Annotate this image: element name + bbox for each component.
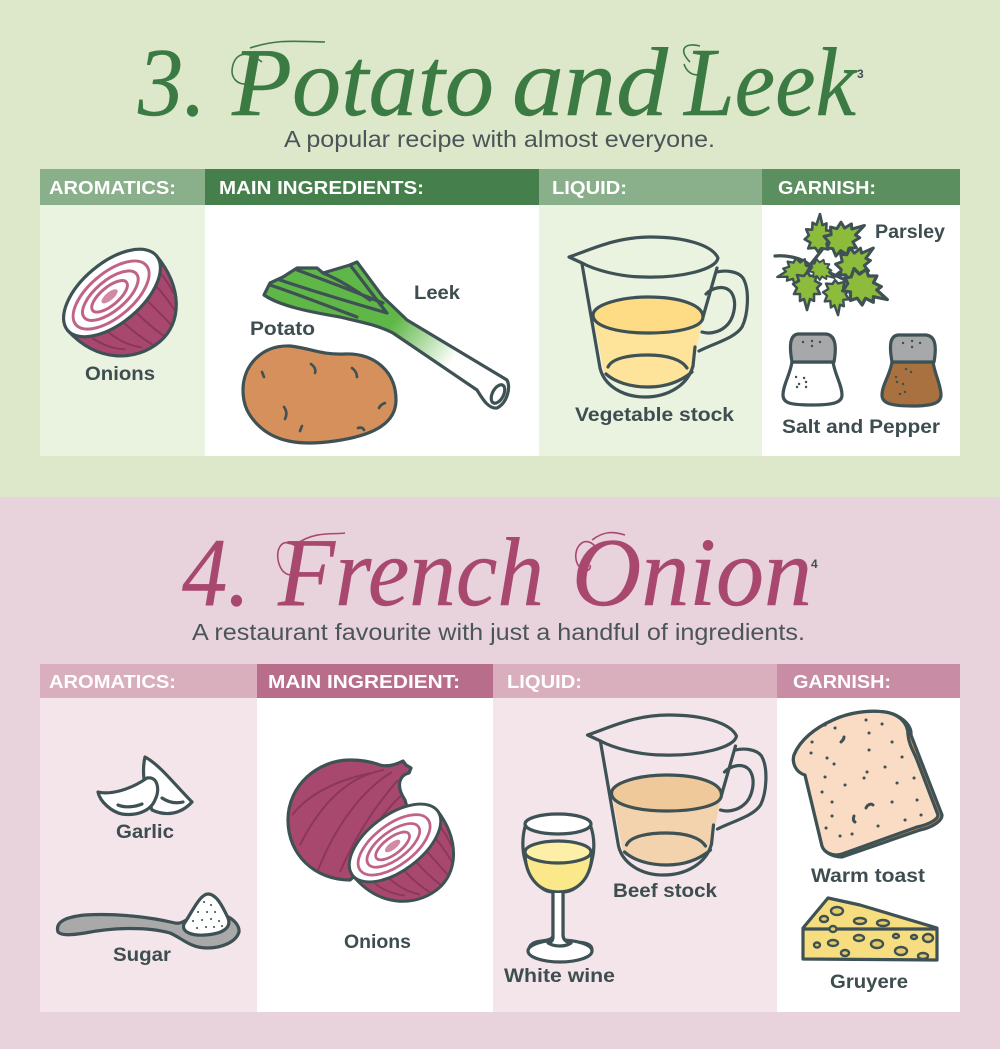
label: onions: Onions [344, 932, 411, 953]
panel body [40, 698, 257, 1012]
header: garnish [777, 664, 960, 698]
icon: gruyere cheese [803, 898, 937, 960]
title: 3. Potato and Leek: Potato [231, 29, 494, 137]
icon: warm toast [793, 711, 942, 857]
icon: salt shaker [783, 334, 842, 405]
icon: spoon of sugar [57, 894, 239, 948]
icon: measuring jug of vegetable stock [569, 237, 747, 397]
background: pink band [0, 497, 1000, 1049]
label: potato: Potato [250, 319, 315, 340]
subtitle: A restaurant favourite with just a handful of ingredients. [192, 619, 805, 645]
panel body [777, 698, 960, 1012]
panel: aromatics [40, 169, 205, 456]
panel: main ingredients [205, 169, 539, 456]
panel body [539, 205, 762, 456]
label: salt and pepper: Salt and Pepper [782, 417, 941, 438]
panel body [493, 698, 777, 1012]
icon: glass of white wine [523, 814, 594, 962]
header: aromatics [40, 664, 257, 698]
header: liquid [539, 169, 762, 205]
header: main ingredients: MAIN INGREDIENTS: [219, 178, 424, 198]
title: 3. Potato and Leek: and [512, 29, 669, 137]
label: gruyere: Gruyere [830, 972, 908, 993]
header: garnish: GARNISH: [778, 178, 876, 198]
header: liquid: LIQUID: [552, 178, 627, 198]
section: potato and leek [40, 29, 960, 456]
icon: halved red onion [48, 233, 200, 382]
title: 4. French Onion: 4 [811, 557, 818, 571]
background: green band [0, 0, 1000, 497]
title: 4. French Onion: Onion [572, 519, 812, 627]
section: french onion [40, 519, 960, 1012]
title: 3. Potato and Leek: Leek [682, 29, 857, 137]
icon: garlic [98, 757, 192, 814]
header: liquid [493, 664, 777, 698]
icon: parsley [774, 212, 895, 316]
label: leek: Leek [414, 283, 460, 304]
panel: liquid [493, 664, 777, 1012]
icon: measuring jug of beef stock [588, 715, 766, 875]
title: 4. French Onion: French [277, 519, 544, 627]
label: parsley: Parsley [875, 222, 945, 243]
label: onions: Onions [85, 364, 155, 385]
label: white wine: White wine [504, 966, 615, 987]
title: 3. Potato and Leek [137, 29, 864, 137]
title: 4. French Onion [182, 519, 818, 627]
header: aromatics: AROMATICS: [49, 178, 176, 198]
subtitle: A popular recipe with almost everyone. [284, 126, 715, 152]
label: warm toast: Warm toast [811, 866, 926, 887]
title: 4. French Onion: 4. [182, 519, 250, 627]
icon: potato [243, 346, 396, 443]
panel: liquid [539, 169, 762, 456]
header: garnish: GARNISH: [793, 672, 891, 692]
panel: aromatics [40, 664, 257, 1012]
header: liquid: LIQUID: [507, 672, 582, 692]
panel: garnish [762, 169, 960, 456]
panel: main ingredient [257, 664, 493, 1012]
icon: leek [264, 262, 509, 408]
icon: red onions [288, 760, 475, 925]
panel body [257, 698, 493, 1012]
header: main ingredient: MAIN INGREDIENT: [268, 672, 460, 692]
header: aromatics: AROMATICS: [49, 672, 176, 692]
icon: pepper shaker [882, 335, 941, 406]
panel body [205, 205, 539, 456]
title: 3. Potato and Leek: 3. [137, 29, 206, 137]
header: main ingredient [257, 664, 493, 698]
label: beef stock: Beef stock [613, 881, 717, 902]
label: sugar: Sugar [113, 945, 172, 966]
header: main ingredients [205, 169, 539, 205]
panel body [40, 205, 205, 456]
title: 3. Potato and Leek: 3 [857, 67, 864, 81]
header: aromatics [40, 169, 205, 205]
header: garnish [762, 169, 960, 205]
label: garlic: Garlic [116, 822, 174, 843]
panel: garnish [777, 664, 960, 1012]
panel body [762, 205, 960, 456]
label: vegetable stock: Vegetable stock [575, 405, 734, 426]
